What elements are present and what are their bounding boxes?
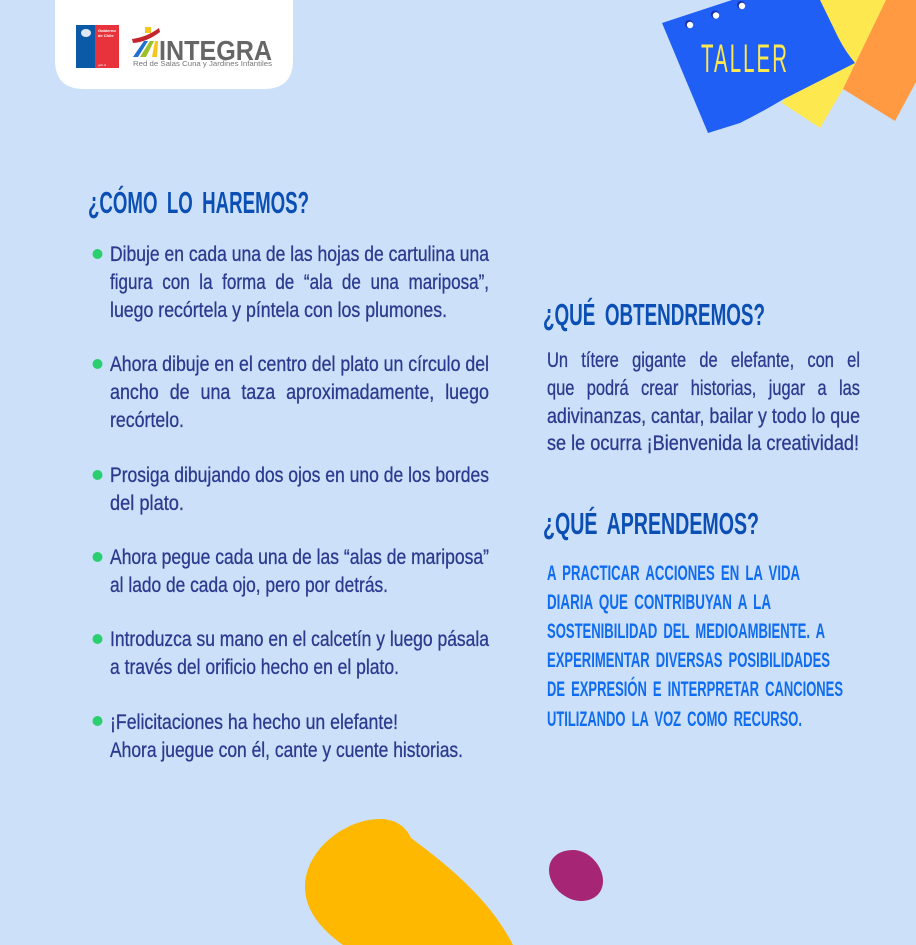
step 2: Ahora dibuje en el centro del plato un círculo del (110, 353, 489, 376)
section: ¿Qué aprendemos? (543, 506, 843, 731)
step 5 (92, 628, 489, 679)
logo panel (55, 0, 293, 89)
label: TALLER: TALLER (701, 37, 789, 81)
paragraph: result (547, 349, 860, 455)
step 4: al lado de cada ojo, pero por detrás. (110, 574, 388, 597)
step 5: Introduzca su mano en el calcetín y luego pásala (110, 628, 489, 651)
step 2 (92, 353, 489, 432)
section: ¿Cómo lo haremos? (88, 184, 489, 762)
logo: Gobierno de Chile (76, 25, 119, 68)
heading: ¿Cómo lo haremos?: ¿CÓMO LO HAREMOS? (88, 184, 309, 220)
step 1 (92, 243, 489, 322)
notes decoration with TALLER label (662, 0, 916, 133)
step 6: ¡Felicitaciones ha hecho un elefante! (110, 711, 398, 734)
step 3 (92, 464, 489, 515)
yellow blob (305, 819, 513, 945)
logo: Integra (132, 27, 272, 68)
paragraph: learning (547, 562, 843, 731)
step 5: a través del orificio hecho en el plato. (110, 656, 399, 679)
logo: Integra: Red de Salas Cuna y Jardines Infantiles (133, 59, 272, 68)
step 6: Ahora juegue con él, cante y cuente historias. (110, 739, 463, 762)
section: ¿Qué obtendremos? (543, 297, 860, 455)
step 1: Dibuje en cada una de las hojas de cartulina una (110, 243, 489, 266)
paragraph: learning: DIARIA QUE CONTRIBUYAN A LA (547, 591, 771, 614)
step 2: ancho de una taza aproximadamente, luego (110, 381, 489, 404)
step 1: luego recórtela y píntela con los plumones. (110, 299, 447, 322)
heading: ¿Qué obtendremos?: ¿QUÉ OBTENDREMOS? (543, 297, 765, 332)
logo: Gobierno de Chile: Gobierno (98, 28, 116, 33)
logo: Integra: INTEGRA (159, 35, 272, 66)
logo: Gobierno de Chile: de Chile (98, 33, 114, 38)
step 1: figura con la forma de “ala de una mariposa”, (110, 271, 489, 294)
purple blob (549, 850, 603, 901)
heading: ¿Qué aprendemos?: ¿QUÉ APRENDEMOS? (543, 506, 759, 541)
step 3: Prosiga dibujando dos ojos en uno de los bordes (110, 464, 489, 487)
step 2: recórtelo. (110, 409, 184, 432)
paragraph: result: adivinanzas, cantar, bailar y todo lo que (547, 405, 860, 428)
step 4: Ahora pegue cada una de las “alas de mariposa” (110, 546, 489, 569)
step 4 (92, 546, 489, 597)
paragraph: result: se le ocurra ¡Bienvenida la creatividad! (547, 432, 859, 455)
logo: Gobierno de Chile: gob.cl (98, 63, 106, 67)
step 3: del plato. (110, 492, 184, 515)
step 6 (92, 711, 463, 762)
